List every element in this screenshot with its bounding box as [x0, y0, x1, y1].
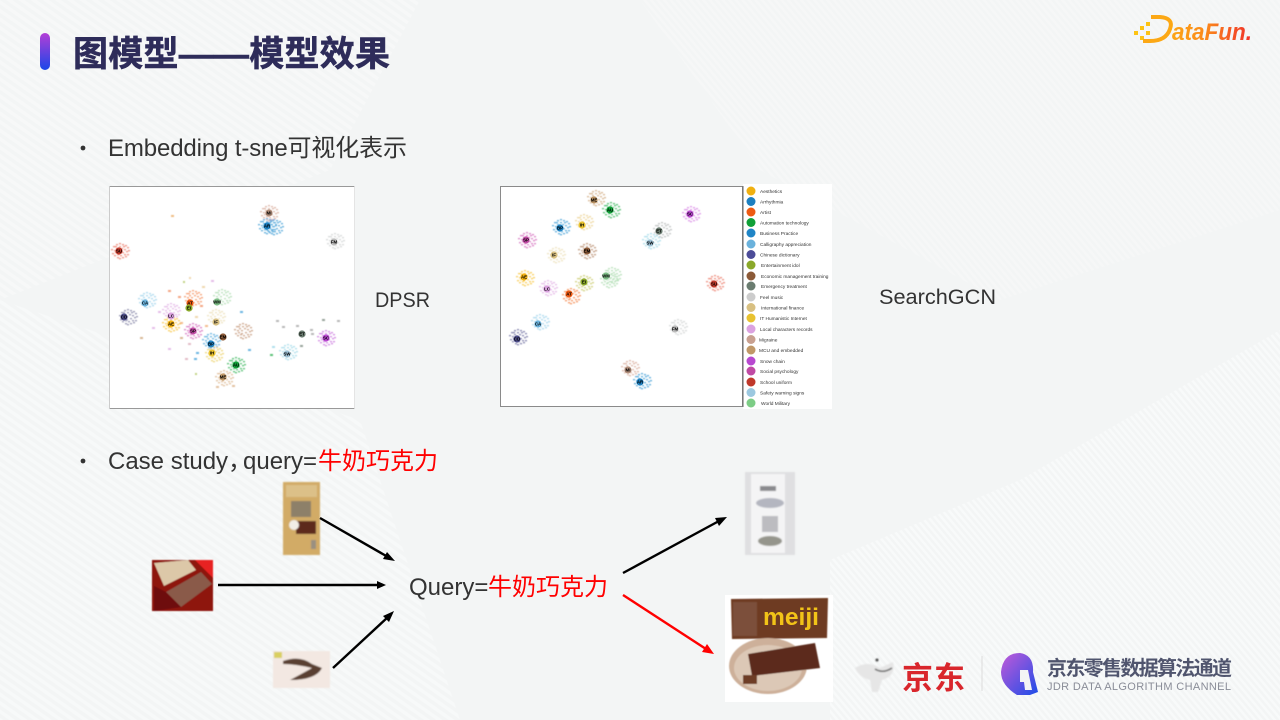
- cluster markers: IF: [214, 320, 218, 324]
- cluster markers: EI: [187, 306, 191, 310]
- logo: DataFun: [1134, 17, 1252, 46]
- cluster markers: CD: [121, 314, 127, 320]
- bullet: embedding heading: Embedding t-sne可视化表示: [108, 135, 407, 162]
- panel: SearchGCN t-SNE scatter: [500, 186, 742, 406]
- channel subtitle: JDR DATA ALGORITHM CHANNEL: [1047, 681, 1231, 693]
- legend: topic categories: Business Practice: [760, 231, 798, 237]
- cluster markers: AT: [566, 292, 572, 296]
- logo divider: [981, 656, 983, 691]
- cluster markers: IF: [552, 252, 556, 258]
- legend: topic categories: Chinese dictionary: [760, 252, 800, 258]
- legend: topic categories: Safety warning signs: [760, 390, 805, 396]
- cluster markers: ET: [656, 228, 662, 234]
- query label: Query=: [409, 574, 488, 601]
- cluster markers: EI: [582, 280, 586, 284]
- legend: topic categories: IT Humanistic Internet: [760, 316, 808, 322]
- product image: milk carton: [745, 472, 795, 555]
- legend: topic categories: Artist: [760, 210, 772, 216]
- logo: DataFun: ataFun.: [1172, 19, 1252, 46]
- cluster markers: BP: [557, 226, 563, 230]
- product image: red chocolate pack: [152, 560, 213, 611]
- cluster markers: AR: [637, 380, 644, 384]
- legend: topic categories: Emergency treatment: [761, 284, 808, 290]
- bullet: case study heading: query=: [243, 448, 317, 475]
- arrow: top product to query: [320, 518, 395, 561]
- arrow: left product to query: [218, 581, 386, 589]
- cluster markers: AT: [187, 300, 193, 306]
- cluster markers: AE: [521, 274, 527, 280]
- legend: topic categories: Entertainment idol: [761, 263, 800, 269]
- cluster markers: WM: [602, 274, 610, 278]
- product image: meiji chocolate: [725, 595, 833, 702]
- cluster markers: BP: [208, 342, 214, 346]
- cluster markers: IH: [210, 350, 214, 356]
- cluster markers: SW: [646, 240, 654, 246]
- legend: topic categories: Automation technology: [760, 220, 809, 226]
- cluster markers: [513, 196, 718, 386]
- product image: chocolate swirl: [273, 651, 330, 688]
- logo: JD dog and wordmark: [855, 658, 965, 696]
- cluster markers: ET: [299, 332, 305, 336]
- cluster markers: SP: [523, 238, 529, 242]
- legend: topic categories: MCU and embedded: [759, 348, 804, 354]
- cluster markers: MI: [267, 210, 271, 216]
- bullet: case study heading: 牛奶巧克力: [318, 448, 438, 475]
- cluster markers: [115, 209, 338, 381]
- panel: DPSR t-SNE scatter: [110, 186, 354, 408]
- arrow: query to meiji product: [623, 595, 714, 654]
- legend: topic categories: Calligraphy appreciation: [760, 242, 812, 248]
- arrow: bottom product to query: [333, 611, 394, 668]
- title: 图模型——模型效果: [73, 35, 390, 74]
- cluster markers: LC: [544, 286, 551, 292]
- arrow: query to milk product: [623, 517, 727, 573]
- product image: meiji chocolate: meiji: [763, 604, 819, 631]
- legend: topic categories: School uniform: [760, 380, 792, 386]
- cluster markers: CD: [514, 336, 520, 342]
- cluster markers: SU: [711, 282, 717, 286]
- cluster markers: EM: [584, 248, 591, 254]
- logo: JD dog and wordmark: 京东: [902, 661, 965, 696]
- legend: topic categories: Social psychology: [760, 369, 799, 375]
- legend: topic categories: [743, 184, 832, 409]
- cluster markers: SC: [323, 336, 330, 340]
- legend: topic categories: Snow chain: [760, 359, 785, 365]
- cluster markers: AR: [264, 224, 271, 228]
- legend: topic categories: Local characters records: [760, 327, 813, 333]
- cluster markers: EM: [220, 334, 227, 340]
- channel name: 京东零售数据算法通道: [1047, 656, 1232, 680]
- cluster markers: CA: [142, 300, 149, 306]
- scattered outlier points: [140, 215, 340, 388]
- label: SearchGCN: SearchGCN: [879, 286, 996, 309]
- cluster markers: IH: [580, 222, 584, 228]
- bullet: case study heading: Case study，: [108, 448, 252, 475]
- cluster markers: CA: [535, 322, 542, 326]
- legend: topic categories: Migraine: [759, 338, 778, 344]
- legend: topic categories: Feel music: [760, 295, 784, 301]
- cluster markers: ME: [591, 198, 597, 202]
- cluster markers: SU: [116, 248, 122, 254]
- cluster markers: FM: [331, 240, 338, 244]
- cluster markers: FM: [672, 326, 679, 332]
- legend: topic categories: World Military: [761, 401, 791, 407]
- cluster markers: MI: [626, 368, 630, 372]
- bullet: case study heading: [81, 448, 438, 475]
- legend: topic categories: International finance: [761, 306, 805, 312]
- legend: topic categories: Aesthetics: [760, 189, 783, 195]
- legend: topic categories: Economic management training: [761, 274, 829, 280]
- title accent bar: [40, 33, 50, 70]
- label: DPSR: DPSR: [375, 289, 430, 312]
- cluster markers: AU: [607, 208, 613, 212]
- cluster markers: SP: [190, 328, 196, 334]
- cluster markers: AE: [168, 322, 174, 326]
- cluster markers: SW: [283, 352, 291, 356]
- query label: 牛奶巧克力: [488, 574, 608, 601]
- product image: gold chocolate box: [283, 482, 320, 555]
- cluster markers: LC: [168, 314, 175, 318]
- logo: JDR channel icon: [1001, 653, 1038, 695]
- cluster markers: WM: [213, 300, 221, 304]
- cluster markers: SC: [687, 212, 694, 216]
- cluster markers: AU: [233, 362, 239, 368]
- cluster markers: ME: [220, 374, 226, 380]
- legend: topic categories: Arrhythmia: [760, 200, 784, 206]
